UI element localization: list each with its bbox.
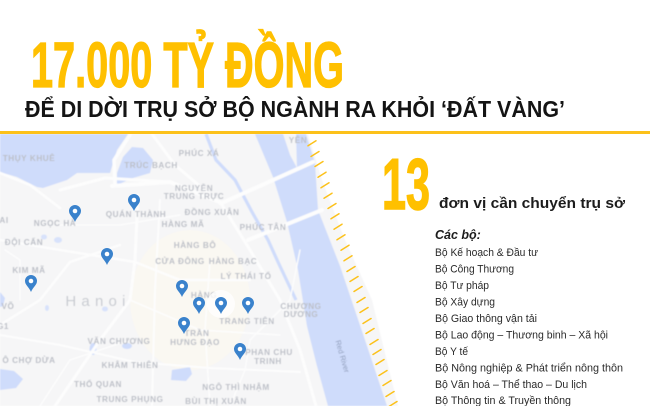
map place labels: Hanoi [65,293,131,310]
map place labels [0,134,351,406]
list of ministries [435,247,623,406]
map place labels: HÀNG MÃ [162,219,204,229]
map place labels: HÀNG [191,290,217,300]
river island [283,134,297,168]
map place labels: PHÚC TÂN [240,221,286,232]
title: 17.000 TỶ ĐỒNG [31,28,344,101]
map place labels: THỤY KHUÊ [3,152,55,163]
map of Hanoi [0,134,398,406]
pin: Kim Ma [25,275,37,292]
map place labels: BÙI THỊ XUÂN [185,395,247,406]
Red River [255,134,387,406]
subtitle: ĐỂ DI DỜI TRỤ SỞ BỘ NGÀNH RA KHỎI ‘ĐẤT VÀNG’ [25,94,565,122]
list of ministries: Bộ Xây dựng [435,296,495,308]
map place labels: VÕ [2,301,15,311]
map place labels: CỬA ĐÔNG [155,255,205,266]
pin: Tran Hung Dao [178,317,190,334]
big number 13: 13 [382,145,430,225]
location pins [25,194,254,360]
pin: Phan Chu Trinh [234,343,246,360]
list of ministries: Bộ Nông nghiệp & Phát triển nông thôn [435,362,623,374]
warm central district tint [130,230,250,370]
pin: Cua Dong west [101,248,113,265]
list of ministries: Bộ Lao động – Thương binh – Xã hội [435,330,608,342]
map place labels: DƯƠNG [284,310,318,319]
West Lake [0,134,128,188]
map place labels: YÊN [289,134,307,145]
map place labels: KIM MÃ [12,265,46,275]
To Lich canal [206,134,296,300]
header rule [0,131,650,134]
pin: Trang Tien [242,297,254,314]
list heading: Các bộ: [435,228,481,242]
map place labels: QUÁN THÀNH [106,209,166,219]
map place labels: Red River [333,339,351,374]
map place labels: TRÚC BẠCH [124,159,178,170]
list of ministries: Bộ Kế hoạch & Đầu tư [435,247,538,259]
map place labels: NGÔ THÌ NHẬM [202,381,270,392]
pin: Hang north [176,280,188,297]
map place labels: HƯNG ĐẠO [170,338,220,347]
map place labels: KHÂM THIÊN [102,359,158,370]
map place labels: LÝ THÁI TỔ [221,270,272,281]
pin: Quan Thanh [128,194,140,211]
map place labels: NGUYỄN [175,182,213,193]
pin: Hoan Kiem [215,297,227,314]
list of ministries: Bộ Giao thông vận tải [435,313,537,325]
map place labels: ĐỒNG XUÂN [184,206,240,217]
map place labels: CHƯƠNG [280,302,322,311]
map place labels: PHÚC XÁ [179,147,219,158]
map place labels: PHAN CHU [245,348,293,357]
map place labels: TRUNG TRỰC [164,192,224,201]
list of ministries: Bộ Y tế [435,346,469,358]
pin: Ngoc Ha [69,205,81,222]
Truc Bach lake [117,147,153,185]
map place labels: VĂN CHƯƠNG [88,336,150,346]
map place labels: HÀNG BÔ [174,239,216,250]
map place labels: TRẦN [185,328,209,338]
map place labels: TRANG TIÊN [219,315,275,326]
list of ministries: Bộ Văn hoá – Thể thao – Du lịch [435,379,587,391]
roads [0,134,322,406]
dashed yellow map border [308,141,397,406]
list of ministries: Bộ Tư pháp [435,280,489,292]
list of ministries: Bộ Công Thương [435,264,514,276]
map place labels: NGỌC HÀ [34,218,76,228]
map place labels: ĐỘI CẤN [5,236,43,247]
caption: units to relocate: đơn vị cần chuyển trụ sở [439,195,625,212]
map place labels: THỔ QUAN [74,378,122,389]
small lakes [90,343,96,355]
map place labels: TRINH [254,357,282,366]
pin: Hang centre [193,297,205,314]
map place labels: TRUNG PHỤNG [96,395,164,404]
map place labels: HÀNG BẠC [209,256,257,266]
map place labels: Ô CHỢ DỪA [2,354,56,365]
